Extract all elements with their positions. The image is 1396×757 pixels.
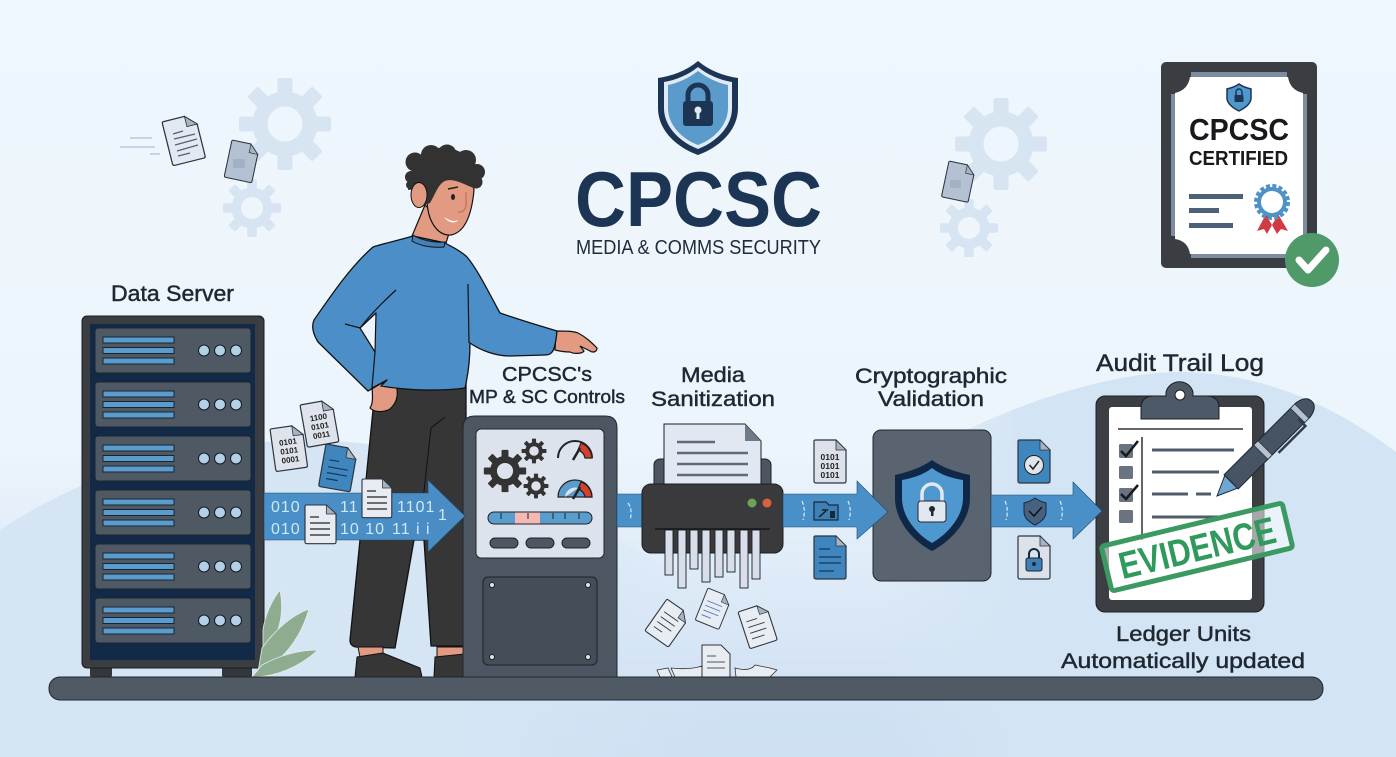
binary document: 0101 — [821, 452, 840, 462]
folder icon — [814, 502, 838, 520]
person: head — [405, 144, 485, 235]
arrow: controls to shredder — [617, 494, 647, 527]
label: controls: CPCSC's — [502, 364, 592, 386]
label: controls: MP & SC Controls — [469, 387, 625, 407]
label: cryptographic validation — [855, 365, 1007, 411]
controls: buttons — [490, 538, 590, 548]
person: sweater — [313, 236, 557, 391]
floating documents top left — [120, 114, 260, 183]
controls cabinet — [463, 416, 617, 677]
certificate — [1161, 62, 1339, 287]
lock document — [1018, 536, 1050, 579]
floating binary document: 1100 — [309, 411, 328, 423]
data server rack — [82, 316, 264, 677]
floating blue document — [319, 444, 358, 492]
person: trousers — [350, 380, 466, 648]
person: collar — [412, 235, 445, 247]
person: arm gap — [360, 313, 376, 352]
arrow: validation to audit log — [991, 482, 1102, 539]
floating binary document: 0001 — [281, 454, 300, 466]
evidence stamp: EVIDENCE — [1115, 510, 1280, 588]
logo: shield with padlock — [658, 61, 738, 155]
ground bar — [49, 677, 1323, 700]
arrow: data server to controls: 11 i i — [392, 521, 431, 538]
document on arrow — [362, 479, 392, 518]
shredder: strips — [665, 530, 760, 588]
check document — [1018, 440, 1050, 483]
label: ledger units: Automatically updated — [1061, 650, 1305, 673]
shredder: paper — [664, 424, 761, 484]
label: ledger units: Ledger Units — [1116, 623, 1251, 646]
hills — [0, 372, 1396, 757]
title: CPCSC — [575, 155, 822, 243]
clipboard: clip — [1141, 382, 1219, 419]
pen — [1210, 394, 1321, 505]
binary document: 0101 — [821, 461, 840, 471]
floating binary document: 0101 — [280, 445, 299, 457]
shredder — [642, 424, 783, 588]
arrow: data server to controls — [264, 480, 465, 552]
binary document: 0101 — [821, 470, 840, 480]
person — [313, 144, 597, 677]
validation box — [873, 430, 991, 581]
document on arrow — [305, 505, 336, 544]
plant — [252, 590, 318, 677]
label: media sanitization — [651, 364, 775, 411]
arrow: data server to controls: 10 10 — [340, 521, 385, 538]
controls: lower plate — [483, 577, 597, 665]
label: media sanitization: Media — [681, 364, 745, 387]
blue document — [814, 536, 846, 579]
background gears top left — [223, 78, 331, 237]
background gears top right — [940, 98, 1047, 257]
certificate: CPCSC — [1189, 112, 1289, 147]
label: audit trail log: Audit Trail Log — [1096, 350, 1264, 377]
controls: gauges — [558, 441, 592, 499]
arrow: data server to controls: 1101 — [397, 499, 435, 516]
subtitle: MEDIA & COMMS SECURITY — [576, 237, 821, 259]
shield check icon — [1024, 498, 1046, 525]
arrow: data server to controls: 11 — [340, 499, 359, 516]
controls: slider — [488, 512, 592, 524]
floating document top right — [941, 161, 976, 202]
binary document — [814, 440, 846, 483]
clipboard: checklist — [1118, 429, 1243, 540]
person: hip hand — [370, 382, 397, 412]
arrow: shredder to validation — [783, 481, 888, 539]
person: neck — [412, 205, 450, 243]
label: ledger units — [1061, 623, 1305, 673]
floating binary document: 0011 — [312, 429, 331, 441]
controls: gears — [484, 439, 548, 498]
floating binary document — [300, 399, 339, 447]
label: data server: Data Server — [111, 281, 234, 306]
label: controls — [469, 364, 625, 407]
arrow: data server to controls: 1 — [438, 507, 448, 524]
shredded paper pile — [645, 588, 777, 677]
arrow: data server to controls: 010 — [271, 499, 301, 516]
floating binary document: 0101 — [310, 420, 330, 432]
validation: shield — [895, 460, 970, 551]
floating binary document: 0101 — [279, 436, 298, 448]
person: pointing hand — [555, 331, 597, 353]
clipboard — [1096, 382, 1321, 612]
label: cryptographic validation: Cryptographic — [855, 365, 1007, 388]
label: media sanitization: Sanitization — [651, 388, 775, 411]
person: shoes — [355, 647, 464, 677]
floating binary document — [270, 425, 308, 472]
arrow: data server to controls: 010 — [271, 521, 301, 538]
certificate: CERTIFIED — [1189, 148, 1288, 170]
person: sweater folds — [345, 284, 469, 388]
label: cryptographic validation: Validation — [878, 388, 984, 411]
